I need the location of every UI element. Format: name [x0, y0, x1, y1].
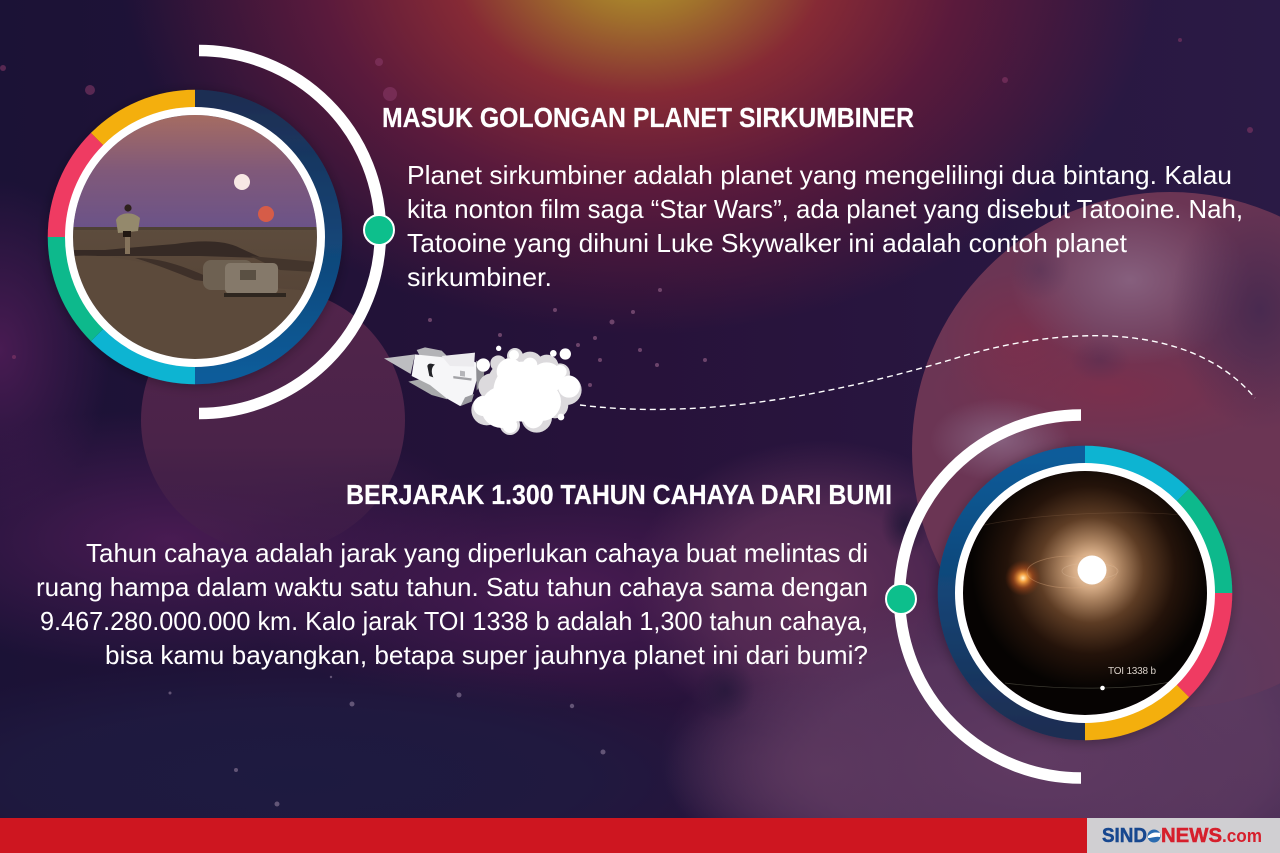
- text block 1: Planet sirkumbiner adalah planet yang mengelilingi dua bintang. Kalau: [407, 160, 1232, 190]
- colour ring: [56, 98, 334, 376]
- text block 2: 9.467.280.000.000 km. Kalo jarak TOI 1338 b adalah 1,300 tahun cahaya,: [40, 606, 868, 636]
- text block 2: [36, 538, 868, 670]
- text block 2: bisa kamu bayangkan, betapa super jauhnya planet ini dari bumi?: [105, 640, 868, 670]
- colour ring: [946, 454, 1224, 732]
- outer white arc: [900, 415, 1081, 778]
- dashed trajectory line: [580, 336, 1255, 409]
- outer white arc: [199, 50, 381, 414]
- green node: [364, 215, 394, 245]
- image: TOI 1338 star system: [963, 450, 1211, 715]
- text block 2: Tahun cahaya adalah jarak yang diperlukan cahaya buat melintas di: [86, 538, 868, 568]
- green node: [886, 584, 916, 614]
- icon: space shuttle with smoke: [384, 346, 582, 435]
- logo: SINDONEWS.com: [1087, 818, 1280, 853]
- photo: Tatooine twin suns: [73, 115, 317, 361]
- large background planet: [912, 192, 1280, 708]
- logo: SINDONEWS.com: SIND: [1102, 825, 1147, 847]
- white photo border: [69, 111, 321, 363]
- label: TOI 1338 b: TOI 1338 b: [1108, 666, 1156, 677]
- figure: Luke Skywalker: [116, 204, 140, 254]
- text block 1: [407, 160, 1243, 292]
- heading 1: MASUK GOLONGAN PLANET SIRKUMBINER: [382, 102, 914, 133]
- smoke cloud: [471, 348, 582, 435]
- lower circle graphic: [886, 415, 1224, 778]
- text block 2: ruang hampa dalam waktu satu tahun. Satu tahun cahaya sama dengan: [36, 572, 868, 602]
- white image border: [959, 467, 1211, 719]
- small background planet: [141, 288, 405, 552]
- upper circle graphic: [56, 50, 394, 414]
- logo: SINDONEWS.com: NEWS: [1161, 825, 1222, 847]
- logo: SINDONEWS.com: .com: [1222, 826, 1262, 846]
- text block 1: Tatooine yang dihuni Luke Skywalker ini adalah contoh planet: [407, 228, 1128, 258]
- text block 1: kita nonton film saga “Star Wars”, ada planet yang disebut Tatooine. Nah,: [407, 194, 1243, 224]
- text block 1: sirkumbiner.: [407, 262, 552, 292]
- heading 2: BERJARAK 1.300 TAHUN CAHAYA DARI BUMI: [346, 479, 892, 510]
- shuttle: [384, 347, 485, 406]
- footer bar: [0, 818, 1280, 853]
